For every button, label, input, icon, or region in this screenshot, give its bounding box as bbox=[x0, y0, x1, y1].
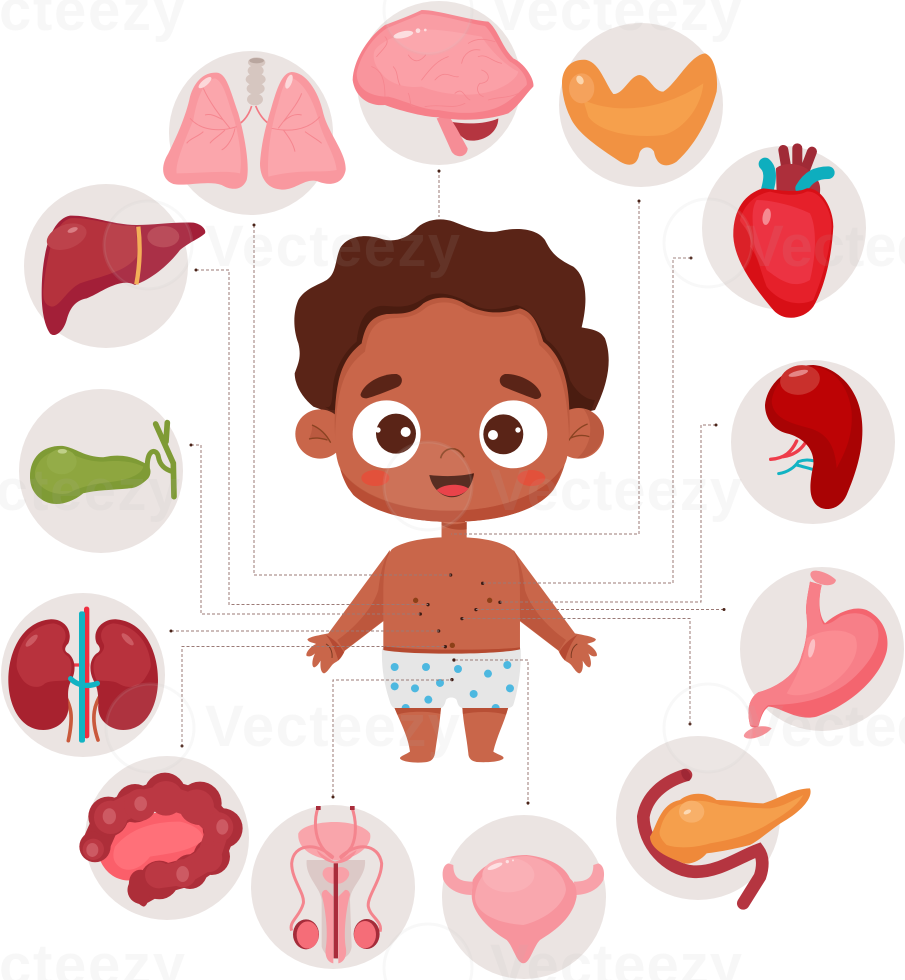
boy: head bbox=[294, 219, 609, 540]
organ: spleen bbox=[765, 362, 862, 509]
connector lines bbox=[170, 170, 726, 805]
face bbox=[335, 298, 570, 522]
right arm bbox=[513, 550, 597, 673]
left arm bbox=[306, 550, 390, 673]
mouth bbox=[429, 473, 474, 497]
organ: gallbladder bbox=[30, 423, 174, 504]
ears bbox=[295, 409, 345, 459]
organ: male reproductive system bbox=[291, 806, 382, 963]
organ: pancreas bbox=[643, 767, 811, 903]
organ: lungs bbox=[163, 57, 346, 190]
connector end dots bbox=[419, 532, 502, 681]
organ: thyroid bbox=[562, 53, 717, 165]
watermarks: Vecteezy bbox=[205, 694, 460, 759]
hair inner shade bbox=[325, 293, 595, 410]
organ: heart bbox=[733, 148, 833, 318]
organ: large intestine bbox=[79, 773, 243, 907]
watermarks: Vecteezy bbox=[205, 214, 460, 279]
legs bbox=[394, 707, 441, 763]
organ: kidneys bbox=[8, 607, 158, 743]
organ: uterus bbox=[443, 855, 604, 963]
eyes bbox=[353, 400, 421, 468]
boy: body bbox=[306, 520, 597, 763]
nose bbox=[441, 449, 464, 458]
organ: liver bbox=[42, 216, 205, 335]
torso bbox=[383, 520, 520, 652]
organ: brain bbox=[353, 10, 533, 156]
shorts bbox=[382, 648, 521, 708]
back hair bbox=[294, 219, 609, 427]
eyebrows bbox=[361, 374, 402, 398]
blush bbox=[361, 470, 389, 486]
watermarks: Vecteezy bbox=[490, 458, 742, 523]
organ: stomach bbox=[744, 571, 887, 739]
